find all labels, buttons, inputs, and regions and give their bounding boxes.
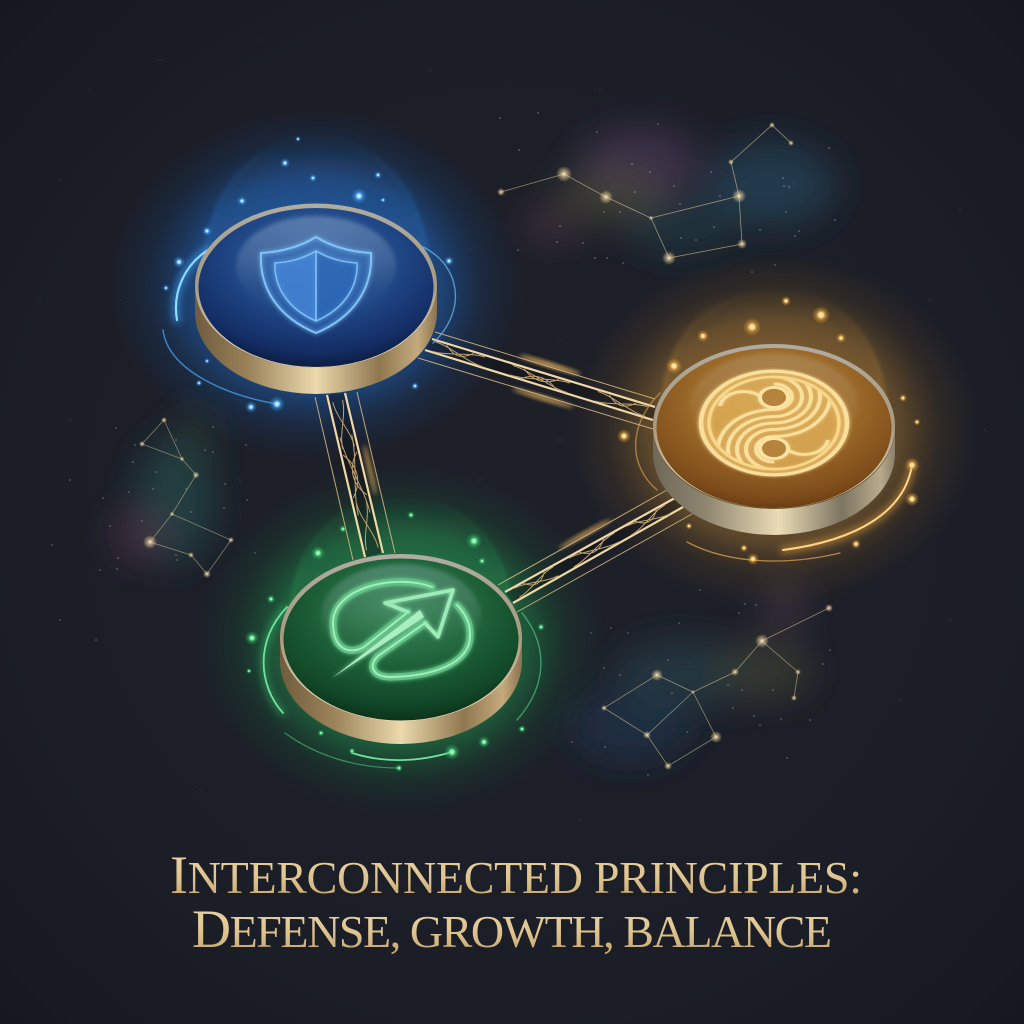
title: INTERCONNECTED PRINCIPLES: — [170, 845, 862, 905]
green halo and dome — [196, 465, 606, 815]
disc: growth (green) — [280, 554, 522, 744]
sparkles: orange — [617, 296, 920, 565]
title: DEFENSE, GROWTH, BALANCE — [192, 899, 832, 959]
constellation: top right — [497, 113, 835, 272]
icon: yin-yang — [696, 368, 852, 478]
connector: defense to balance — [418, 332, 655, 429]
scattered background stars — [40, 40, 985, 820]
energy arcs: green — [264, 607, 541, 768]
constellation: lower left — [52, 405, 255, 640]
sparkles: green — [245, 511, 545, 772]
orange halo and dome — [569, 252, 979, 608]
title — [170, 845, 862, 959]
icon: shield — [261, 237, 371, 333]
icon: growth arrow — [332, 582, 470, 678]
disc: defense (blue) — [195, 204, 437, 394]
connector: defense to growth — [315, 392, 395, 560]
sparkles: blue — [162, 136, 454, 413]
connector: growth to balance — [498, 490, 692, 612]
energy arcs: blue — [163, 247, 455, 412]
blue halo and dome — [111, 110, 521, 460]
constellation: lower right — [570, 575, 833, 775]
energy arcs: orange — [636, 393, 919, 561]
disc: balance (orange) — [653, 344, 895, 535]
